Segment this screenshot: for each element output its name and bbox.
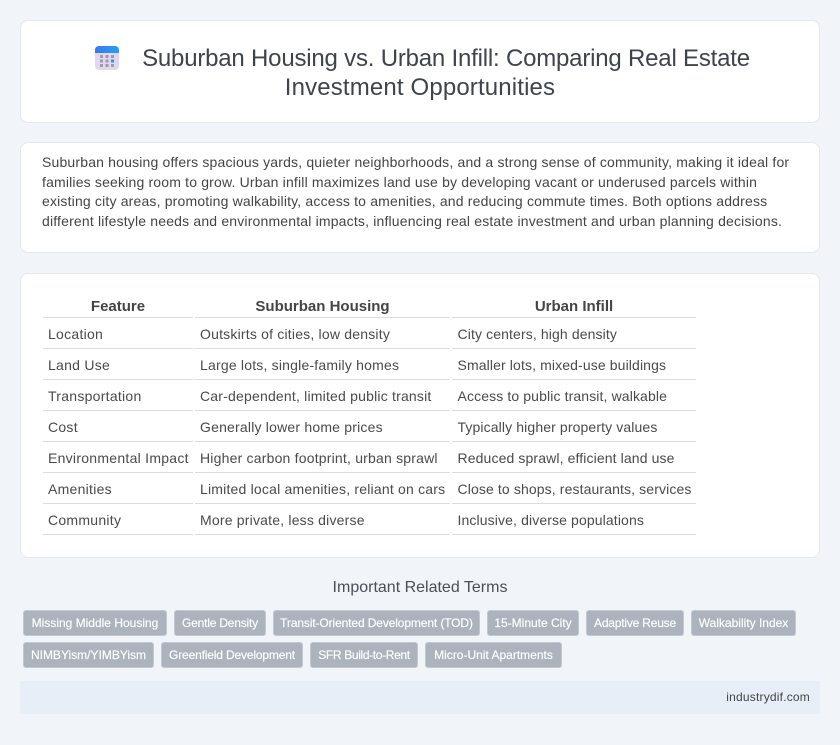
table row: environmental impact — [48, 450, 675, 466]
table row: land use: Large lots, single-family homes — [200, 357, 399, 373]
table row: location: City centers, high density — [458, 326, 617, 342]
tag — [161, 642, 303, 668]
tag: Gentle Density — [182, 616, 258, 630]
tag — [273, 610, 480, 636]
text block: introduction: families seeking room to grow. Urban infill maximizes land use by developing vacant or underused parcels within — [42, 174, 757, 190]
title: Investment Opportunities — [285, 74, 555, 101]
table row: land use: Land Use — [48, 357, 110, 373]
table header: urban infill: Urban Infill — [535, 298, 613, 315]
text block: introduction: different lifestyle needs and environmental impacts, influencing real estate investment and urban planning decisions. — [42, 213, 782, 229]
table row: location: Location — [48, 326, 103, 342]
tag: 15-Minute City — [494, 616, 572, 630]
table row: environmental impact: Higher carbon footprint, urban sprawl — [200, 450, 438, 466]
tag — [23, 610, 167, 636]
table row: community: Community — [48, 512, 121, 528]
table row: community: More private, less diverse — [200, 512, 365, 528]
table row: transportation — [48, 388, 667, 404]
table row: amenities: Amenities — [48, 481, 112, 497]
tag: Micro-Unit Apartments — [434, 648, 553, 662]
table header: feature: Feature — [91, 298, 145, 315]
heading: related terms: Important Related Terms — [333, 579, 507, 596]
table row: cost — [48, 419, 657, 435]
table row: transportation: Access to public transit, walkable — [458, 388, 667, 404]
table row: community — [48, 512, 644, 528]
tag: Greenfield Development — [169, 648, 295, 662]
tag: Walkability Index — [699, 616, 788, 630]
table row: amenities — [48, 481, 691, 497]
tag: SFR Build-to-Rent — [318, 648, 410, 662]
footer bar — [20, 681, 820, 714]
table row: amenities: Limited local amenities, reliant on cars — [200, 481, 445, 497]
table row: transportation: Car-dependent, limited public transit — [200, 388, 432, 404]
title — [142, 45, 750, 101]
table header: suburban housing: Suburban Housing — [255, 298, 390, 315]
tag — [691, 610, 796, 636]
tag: Transit-Oriented Development (TOD) — [280, 616, 473, 630]
table row: land use — [48, 357, 666, 373]
table row: land use: Smaller lots, mixed-use buildings — [458, 357, 666, 373]
table row: community: Inclusive, diverse populations — [458, 512, 644, 528]
footer source: industrydif.com — [726, 690, 810, 704]
tag — [174, 610, 266, 636]
tag — [586, 610, 684, 636]
table row: location — [48, 326, 617, 342]
title: Suburban Housing vs. Urban Infill: Comparing Real Estate — [142, 45, 750, 72]
text block: introduction — [42, 154, 789, 229]
table row: transportation: Transportation — [48, 388, 142, 404]
icon: calendar — [95, 46, 119, 70]
tag — [487, 610, 579, 636]
panel: comparison table — [20, 273, 820, 558]
tags: related terms — [23, 610, 796, 668]
tag: Missing Middle Housing — [32, 616, 158, 630]
tag: Adaptive Reuse — [594, 616, 676, 630]
text block: introduction: Suburban housing offers spacious yards, quieter neighborhoods, and a strong sense of community, making it ideal for — [42, 154, 789, 170]
tag — [23, 642, 154, 668]
table row: cost: Generally lower home prices — [200, 419, 383, 435]
panel: introduction — [20, 142, 820, 253]
panel: title card — [20, 20, 820, 123]
table row: cost: Typically higher property values — [458, 419, 657, 435]
tag — [310, 642, 418, 668]
table row: environmental impact: Reduced sprawl, efficient land use — [458, 450, 675, 466]
table row: amenities: Close to shops, restaurants, services — [458, 481, 691, 497]
table row: location: Outskirts of cities, low density — [200, 326, 390, 342]
table row: cost: Cost — [48, 419, 78, 435]
tag — [425, 642, 562, 668]
tag: NIMBYism/YIMBYism — [31, 648, 146, 662]
text block: introduction: existing city areas, promoting walkability, access to amenities, and reducing commute times. Both options address — [42, 193, 767, 209]
table row: environmental impact: Environmental Impact — [48, 450, 189, 466]
